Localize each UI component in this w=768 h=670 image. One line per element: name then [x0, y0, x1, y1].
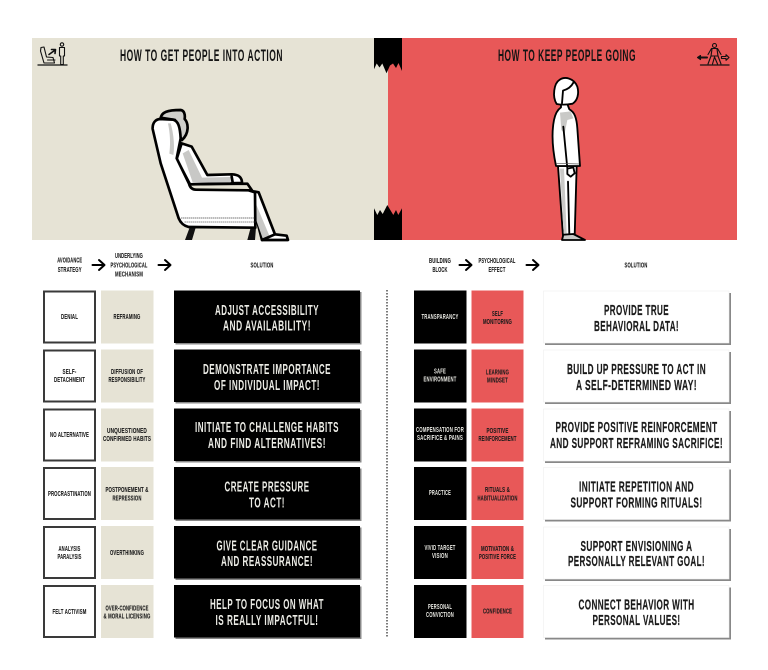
panel: keep people going	[388, 38, 737, 240]
right row 1: self monitoring: MONITORING	[483, 319, 512, 326]
right row 4: rituals and habitualization: HABITUALIZATION	[478, 495, 518, 502]
left row 4: postponement and repression	[101, 467, 154, 520]
right row 3: positive reinforcement: REINFORCEMENT	[478, 436, 517, 443]
illustration: person sitting in armchair	[153, 110, 288, 240]
right row 6: solution	[544, 586, 731, 640]
column header: building block: BUILDING	[429, 258, 451, 265]
left row 6: felt activism	[44, 586, 95, 637]
left row 4: procrastination: PROCRASTINATION	[48, 491, 91, 498]
right row 1: transparancy: TRANSPARANCY	[422, 314, 459, 321]
left row 2: diffusion of responsibility	[101, 350, 154, 402]
torn black strip bottom	[374, 205, 402, 240]
left row 3: unquestioned confirmed habits: CONFIRMED HABITS	[103, 436, 151, 443]
column header: psychological effect: EFFECT	[488, 267, 506, 274]
left row 6: solution: IS REALLY IMPACTFUL!	[216, 613, 318, 629]
column header: building block: BLOCK	[432, 267, 448, 274]
right row 6: personal conviction: PERSONAL	[428, 604, 452, 611]
right row 3: compensation for sacrifice and pains: SACRIFICE & PAINS	[417, 435, 463, 442]
right row 1: solution	[544, 291, 731, 345]
right row 5: motivation and positive force: POSITIVE FORCE	[479, 554, 516, 561]
right row 5: motivation and positive force	[472, 526, 524, 579]
left row 1: solution	[174, 290, 362, 344]
right row 3: compensation for sacrifice and pains: COMPENSATION FOR	[416, 427, 464, 434]
left row 6: solution	[174, 585, 362, 639]
left row 4: procrastination	[44, 468, 95, 519]
column header: solution left: SOLUTION	[250, 262, 274, 270]
left row 6: solution: HELP TO FOCUS ON WHAT	[210, 597, 324, 613]
left row 1: solution: AND AVAILABILITY!	[223, 318, 311, 334]
arrow	[460, 260, 472, 270]
left row 1: solution: ADJUST ACCESSIBILITY	[215, 303, 319, 319]
icon: walking person with arrows	[698, 44, 729, 65]
column header: psychological effect: PSYCHOLOGICAL	[478, 258, 516, 265]
left row 2: diffusion of responsibility: DIFFUSION OF	[111, 369, 143, 376]
column header: avoidance strategy: STRATEGY	[58, 267, 82, 274]
illustration: standing person	[553, 78, 585, 240]
right row 6: confidence	[472, 585, 524, 638]
left row 3: solution: AND FIND ALTERNATIVES!	[208, 436, 326, 452]
right row 5: vivid target vision: VIVID TARGET	[424, 545, 456, 552]
left row 1: denial: DENIAL	[61, 314, 78, 321]
left row 1: reframing: REFRAMING	[114, 314, 141, 321]
torn black strip top	[374, 38, 402, 73]
left row 1: denial	[44, 292, 95, 342]
column header: building block	[429, 258, 451, 274]
left row 5: analysis paralysis: ANALYSIS	[58, 546, 81, 553]
right row 6: personal conviction: CONVICTION	[426, 612, 454, 619]
column header: underlying psychological mechanism: UNDERLYING	[115, 253, 143, 260]
right row 6: personal conviction	[414, 585, 466, 638]
left row 5: solution: GIVE CLEAR GUIDANCE	[216, 539, 318, 555]
arrow	[158, 260, 170, 270]
left row 3: no alternative	[44, 410, 95, 460]
left row 6: felt activism: FELT ACTIVISM	[52, 609, 86, 616]
title: how to get people into action: HOW TO GET PEOPLE INTO ACTION	[120, 47, 283, 65]
right row 1: transparancy	[414, 290, 466, 344]
right row 2: safe environment	[414, 350, 466, 402]
left row 4: solution	[174, 467, 362, 521]
right row 6: solution: PERSONAL VALUES!	[592, 613, 680, 629]
column header: solution right: SOLUTION	[624, 262, 648, 270]
column header: underlying psychological mechanism: PSYCHOLOGICAL	[110, 262, 148, 270]
left row 2: solution: DEMONSTRATE IMPORTANCE	[203, 362, 331, 378]
right row 2: solution	[544, 350, 731, 404]
right row 6: confidence: CONFIDENCE	[483, 608, 512, 615]
left row 5: overthinking: OVERTHINKING	[110, 550, 144, 557]
left row 5: solution	[174, 526, 362, 580]
right row 1: solution: PROVIDE TRUE	[604, 303, 669, 319]
left row 2: self-detachment: SELF-	[62, 369, 77, 376]
left row 5: analysis paralysis: PARALYSIS	[58, 554, 82, 561]
right row 2: learning mindset: MINDSET	[487, 378, 508, 384]
left row 4: postponement and repression: POSTPONEMENT &	[106, 487, 148, 494]
column header: psychological effect	[478, 258, 516, 274]
left row 5: analysis paralysis	[44, 527, 95, 578]
left row 6: over-confidence and moral licensing: OVER-CONFIDENCE	[106, 605, 149, 612]
column header: avoidance strategy	[57, 258, 82, 274]
right row 1: self monitoring: SELF	[492, 311, 503, 318]
right row 2: learning mindset	[472, 350, 524, 402]
right row 2: safe environment: SAFE	[434, 368, 446, 376]
left row 2: diffusion of responsibility: RESPONSIBILITY	[108, 377, 146, 384]
left row 3: solution: INITIATE TO CHALLENGE HABITS	[195, 420, 339, 436]
left row 3: unquestioned confirmed habits	[101, 408, 154, 462]
left row 6: over-confidence and moral licensing: & MORAL LICENSING	[104, 613, 151, 620]
title: how to keep people going: HOW TO KEEP PEOPLE GOING	[498, 47, 636, 65]
left row 3: unquestioned confirmed habits: UNQUESTIONED	[107, 428, 147, 435]
left row 2: solution: OF INDIVIDUAL IMPACT!	[214, 378, 320, 394]
column header: underlying psychological mechanism: MECHANISM	[115, 272, 143, 278]
right row 4: rituals and habitualization	[472, 467, 524, 520]
right row 4: rituals and habitualization: RITUALS &	[485, 487, 510, 494]
right row 3: solution	[544, 409, 731, 463]
left row 5: solution: AND REASSURANCE!	[221, 554, 313, 570]
icon: chair with arrow to standing person	[38, 43, 67, 65]
right row 4: practice: PRACTICE	[429, 490, 451, 497]
right row 5: vivid target vision: VISION	[432, 553, 448, 560]
right row 4: solution	[544, 468, 731, 522]
right row 2: learning mindset: LEARNING	[486, 370, 509, 376]
left row 2: self-detachment	[44, 350, 95, 402]
column header: underlying psychological mechanism	[110, 253, 148, 278]
right row 3: compensation for sacrifice and pains	[414, 408, 466, 462]
right row 3: positive reinforcement	[472, 408, 524, 462]
left row 3: no alternative: NO ALTERNATIVE	[50, 432, 89, 439]
right row 2: safe environment: ENVIRONMENT	[424, 376, 457, 384]
right row 5: vivid target vision	[414, 526, 466, 579]
left row 2: solution	[174, 350, 362, 404]
left row 6: over-confidence and moral licensing	[101, 585, 154, 638]
column header: avoidance strategy: AVOIDANCE	[57, 258, 82, 264]
right row 1: self monitoring	[472, 290, 524, 344]
left row 5: overthinking	[101, 526, 154, 579]
right row 5: solution	[544, 527, 731, 581]
left row 4: solution: TO ACT!	[249, 495, 285, 511]
left row 1: reframing	[101, 290, 154, 344]
left row 3: solution	[174, 408, 362, 462]
right row 1: solution: BEHAVIORAL DATA!	[594, 319, 679, 335]
arrow	[92, 260, 104, 270]
left row 4: postponement and repression: REPRESSION	[112, 496, 142, 502]
panel: get people into action	[32, 38, 388, 240]
right row 3: positive reinforcement: POSITIVE	[486, 428, 509, 435]
left row 2: self-detachment: DETACHMENT	[54, 377, 85, 384]
left row 4: solution: CREATE PRESSURE	[224, 480, 310, 496]
right row 5: motivation and positive force: MOTIVATION &	[481, 546, 514, 553]
arrow	[526, 260, 538, 270]
right row 4: practice	[414, 467, 466, 520]
